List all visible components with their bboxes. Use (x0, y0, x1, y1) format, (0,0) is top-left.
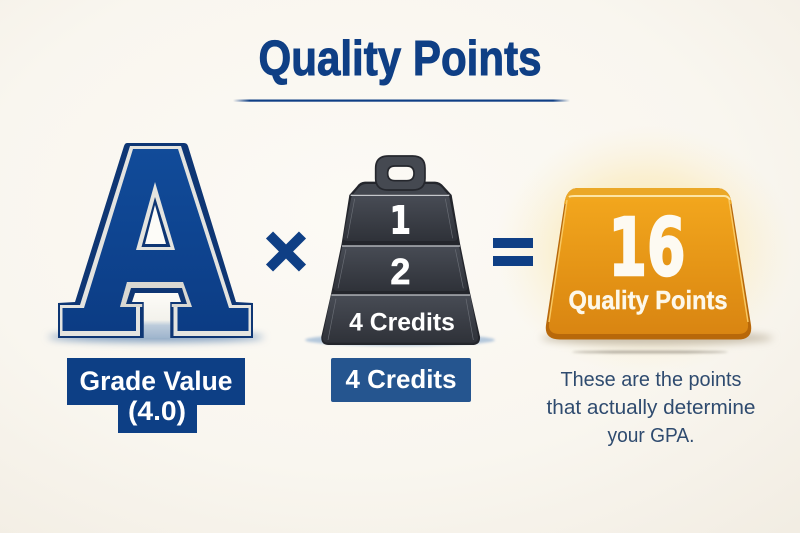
weight segment 1 (343, 195, 457, 243)
explanatory text (546, 368, 756, 447)
title underline (233, 100, 570, 102)
weight segment 3 (323, 295, 478, 343)
label: grade value (67, 358, 245, 433)
label: grade value: Grade Value (80, 366, 232, 396)
weight segment 3: 4 Credits (349, 309, 455, 337)
weight segment 2: 2 (390, 251, 410, 292)
explanatory text: your GPA. (608, 424, 694, 447)
icon: stacked credit weight (305, 156, 495, 346)
explanatory text: These are the points (560, 368, 742, 391)
label: grade value: (4.0) (128, 396, 186, 426)
weight cap (353, 184, 447, 194)
multiply sign (270, 235, 302, 268)
result number: 16 (608, 202, 686, 294)
result caption: Quality Points (568, 285, 728, 315)
title: Quality Points (258, 32, 542, 86)
counter of the A (136, 182, 175, 250)
explanatory text: that actually determine (546, 396, 756, 419)
equals sign (493, 238, 533, 266)
label: credits (331, 358, 471, 402)
weight silhouette (321, 182, 480, 345)
weight segment 1: 1 (390, 198, 411, 243)
icon: varsity letter A (48, 143, 264, 342)
icon: gold bar result (541, 188, 773, 353)
weight handle (376, 156, 425, 190)
label: credits: 4 Credits (346, 364, 456, 394)
golden glow behind result (495, 125, 795, 375)
weight segment 2 (334, 245, 467, 292)
